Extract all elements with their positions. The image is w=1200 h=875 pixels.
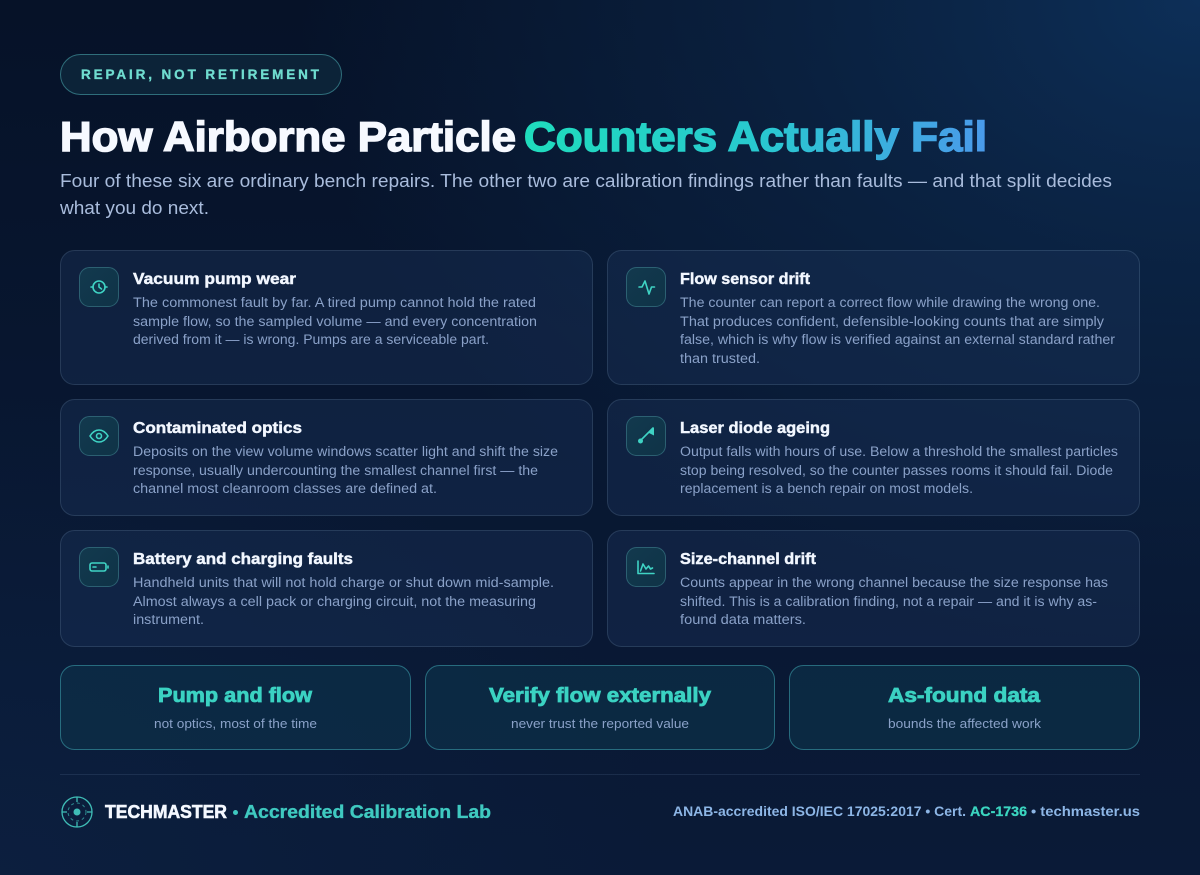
body text: instrument. <box>133 612 204 627</box>
body text: stop being resolved, so the counter passes rooms it should fail. Diode <box>680 463 1113 478</box>
icon: spectrum chart <box>626 548 666 586</box>
body text: found data matters. <box>680 612 806 627</box>
body text <box>680 295 1116 366</box>
body text: Deposits on the view volume windows scatter light and shift the size <box>133 444 558 459</box>
body text <box>680 575 1108 627</box>
body text: response, usually undercounting the smallest channel first — the <box>133 463 538 478</box>
footer brand: Accredited Calibration Lab <box>244 802 491 822</box>
callout: pump and flow <box>60 666 410 750</box>
icon: pulse <box>626 268 666 306</box>
callout: verify flow externally <box>426 666 774 750</box>
body text: than trusted. <box>680 351 760 366</box>
body text: channel most cleanroom classes are defined at. <box>133 481 437 496</box>
body text: Counts appear in the wrong channel because the size response has <box>680 575 1108 590</box>
body text: sample flow, so the sampled volume — and every concentration <box>133 314 537 329</box>
panel: flow sensor drift <box>608 250 1140 384</box>
subtitle <box>59 171 1112 218</box>
body text: The counter can report a correct flow while drawing the wrong one. <box>680 295 1100 310</box>
badge: repair, not retirement <box>60 54 342 94</box>
callout: verify flow externally: never trust the reported value <box>511 716 689 731</box>
footer brand: TECHMASTER <box>105 802 227 822</box>
callout: pump and flow: Pump and flow <box>158 684 312 707</box>
body text: The commonest fault by far. A tired pump cannot hold the rated <box>133 295 536 310</box>
body text: Output falls with hours of use. Below a threshold the smallest particles <box>680 444 1118 459</box>
heading: Laser diode ageing <box>680 420 830 437</box>
body text: Handheld units that will not hold charge or shut down mid-sample. <box>133 575 554 590</box>
footer credentials: AC-1736 <box>970 803 1027 819</box>
icon: techmaster logo <box>62 797 92 827</box>
heading: Size-channel drift <box>680 551 817 568</box>
panel: contaminated optics <box>60 400 592 516</box>
callout: as-found data: As-found data <box>888 684 1041 707</box>
title: How Airborne Particle <box>60 113 516 160</box>
footer credentials: • techmaster.us <box>1031 803 1140 819</box>
body text <box>133 444 558 496</box>
callout: as-found data <box>790 666 1140 750</box>
panel: laser diode ageing <box>608 400 1140 516</box>
heading: Contaminated optics <box>133 420 302 437</box>
title: Counters Actually Fail <box>524 113 987 160</box>
icon: pump clock <box>80 268 118 306</box>
icon: battery <box>80 548 118 586</box>
icon: eye <box>80 416 118 456</box>
icon: laser beam <box>626 416 666 456</box>
callout: verify flow externally: Verify flow externally <box>489 684 712 707</box>
subtitle: Four of these six are ordinary bench repairs. The other two are calibration findings rather than faults — and that split decides <box>60 171 1112 191</box>
panel: battery and charging faults <box>60 530 592 646</box>
body text: That produces confident, defensible-looking counts that are simply <box>680 314 1104 329</box>
body text: false, which is why flow is verified against an external standard rather <box>680 332 1116 347</box>
body text <box>133 295 537 347</box>
heading: Flow sensor drift <box>680 271 811 288</box>
heading: Battery and charging faults <box>133 551 353 568</box>
footer credentials: ANAB-accredited ISO/IEC 17025:2017 • Cert. <box>673 803 966 819</box>
badge: repair, not retirement: REPAIR, NOT RETIREMENT <box>81 67 320 82</box>
footer credentials <box>673 803 1140 819</box>
body text: derived from it — is wrong. Pumps are a serviceable part. <box>133 332 489 347</box>
body text: Almost always a cell pack or charging circuit, not the measuring <box>133 594 536 609</box>
body text <box>680 444 1118 496</box>
body text: shifted. This is a calibration finding, not a repair — and it is why as- <box>680 594 1097 609</box>
heading: Vacuum pump wear <box>133 271 296 288</box>
footer brand <box>105 802 491 822</box>
callout: as-found data: bounds the affected work <box>888 716 1042 731</box>
panel: vacuum pump wear <box>60 250 592 384</box>
panel: size-channel drift <box>608 530 1140 646</box>
title <box>60 113 987 160</box>
body text: replacement is a bench repair on most models. <box>680 481 973 496</box>
body text <box>133 575 554 627</box>
callout: pump and flow: not optics, most of the time <box>154 716 317 731</box>
subtitle: what you do next. <box>59 198 209 218</box>
